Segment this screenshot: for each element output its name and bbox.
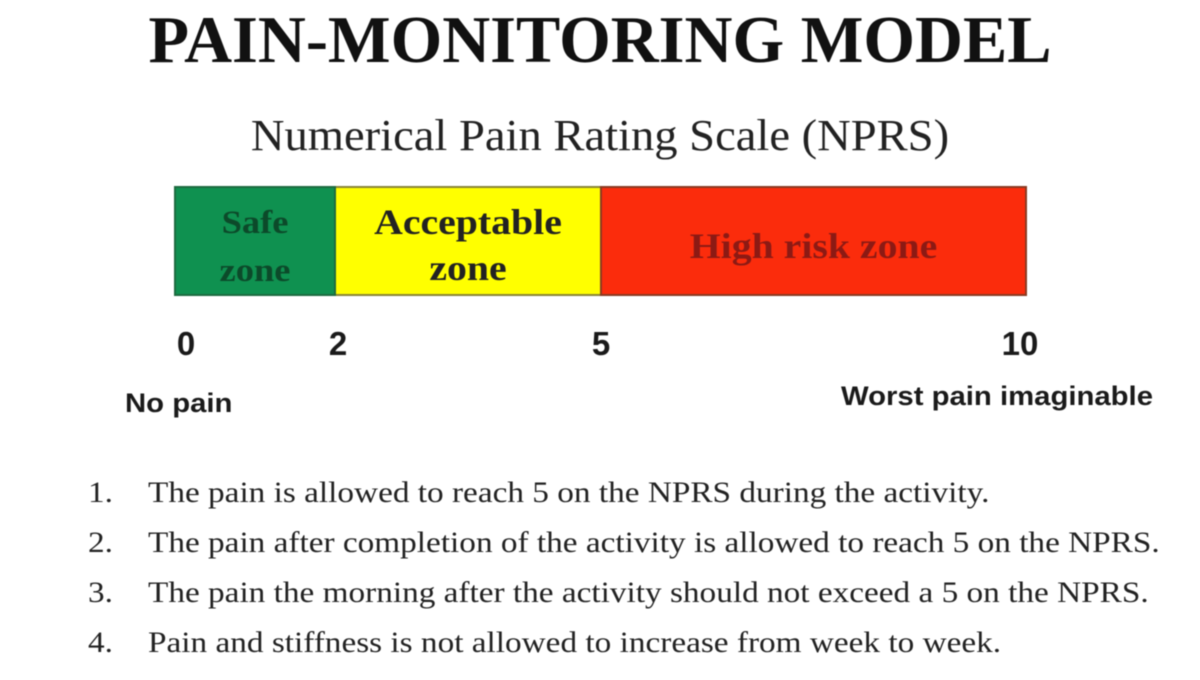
worst pain label: Worst pain imaginable	[841, 381, 1153, 411]
rule 4: 4.	[88, 626, 113, 659]
high risk zone	[600, 186, 1027, 296]
rule 3: 3.	[88, 576, 113, 609]
acceptable zone: Acceptable	[374, 202, 562, 242]
title: PAIN-MONITORING MODEL	[148, 4, 1052, 77]
rule 4: Pain and stiffness is not allowed to increase from week to week.	[148, 626, 1001, 659]
high risk zone: High risk zone	[690, 226, 937, 266]
rule 2: 2.	[88, 526, 113, 559]
scale label 2: 2	[329, 325, 347, 362]
rule 2: The pain after completion of the activity is allowed to reach 5 on the NPRS.	[148, 526, 1160, 559]
safe zone: Safe	[222, 205, 288, 241]
rule 1: The pain is allowed to reach 5 on the NPRS during the activity.	[148, 476, 989, 509]
safe zone	[174, 186, 336, 296]
scale label 0: 0	[177, 325, 195, 362]
rule 1: 1.	[88, 476, 113, 509]
subtitle: Numerical Pain Rating Scale (NPRS)	[251, 111, 949, 160]
no pain label: No pain	[125, 388, 232, 418]
scale label 10: 10	[1002, 325, 1038, 362]
safe zone: zone	[220, 253, 290, 289]
acceptable zone	[336, 186, 600, 296]
acceptable zone: zone	[429, 248, 507, 288]
scale label 5: 5	[592, 325, 610, 362]
pain scale bar	[173, 185, 1028, 297]
numbered rules list	[88, 476, 1160, 659]
rule 3: The pain the morning after the activity should not exceed a 5 on the NPRS.	[148, 576, 1149, 609]
